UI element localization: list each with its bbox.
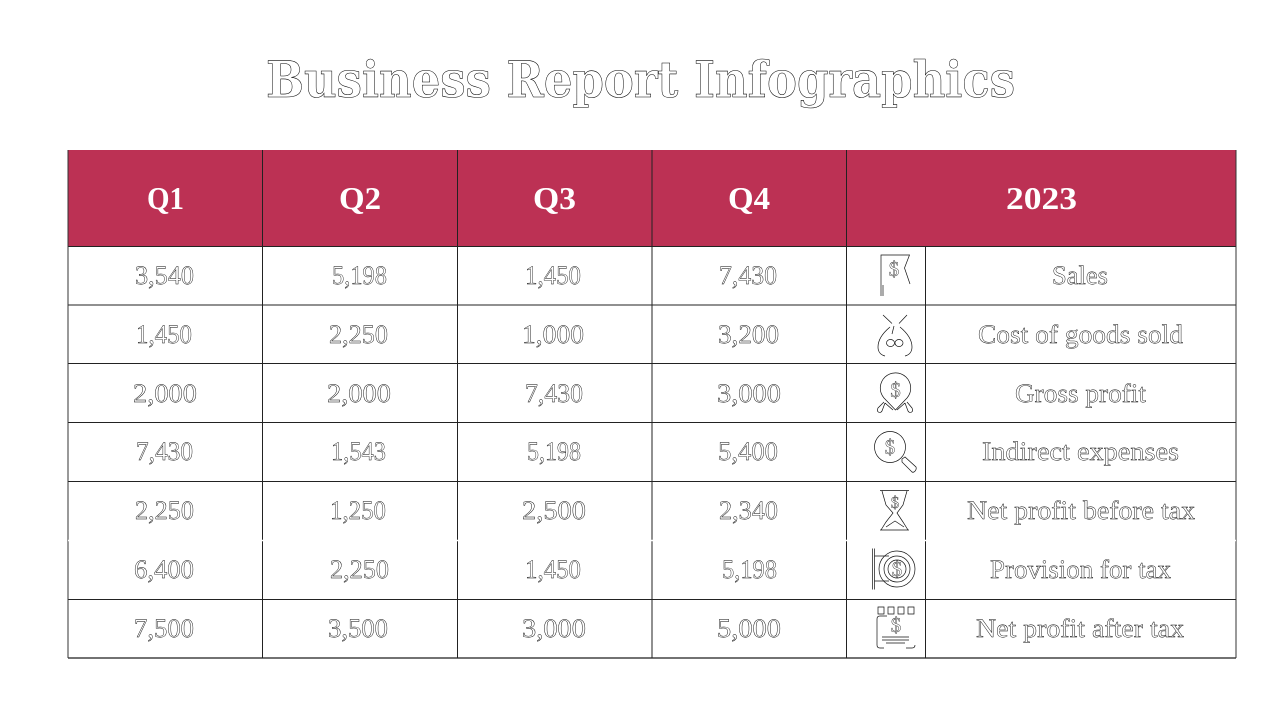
row: Net profit after tax: 3,000 — [522, 614, 586, 643]
icon: certificate with dollar: $ — [891, 613, 901, 637]
row: Provision for tax: 5,198 — [722, 555, 777, 584]
row: Sales: 1,450 — [525, 261, 581, 290]
icon: target sign with dollar: $ — [892, 557, 902, 581]
row: Net profit after tax: Net profit after tax — [976, 614, 1184, 643]
row: Provision for tax: 1,450 — [525, 555, 581, 584]
row: Net profit before tax: 2,250 — [135, 496, 194, 525]
row: Cost of goods sold: Cost of goods sold — [978, 320, 1183, 349]
row: Net profit before tax: 2,340 — [719, 496, 778, 525]
header: Q2: Q2 — [339, 180, 381, 216]
row: Gross profit: 3,000 — [717, 379, 781, 408]
row: Cost of goods sold: 1,000 — [522, 320, 584, 349]
row: Indirect expenses: 7,430 — [136, 437, 193, 466]
row: Cost of goods sold: 2,250 — [329, 320, 388, 349]
row: Sales: 5,198 — [332, 261, 387, 290]
header: 2023: 2023 — [1006, 180, 1077, 216]
row: Indirect expenses: 5,400 — [718, 437, 778, 466]
row: Provision for tax: Provision for tax — [990, 555, 1171, 584]
row: Indirect expenses: Indirect expenses — [982, 437, 1179, 466]
row: Sales: 3,540 — [135, 261, 194, 290]
row: Provision for tax — [134, 555, 1171, 584]
row: Sales: 7,430 — [719, 261, 777, 290]
row: Net profit after tax — [134, 614, 1184, 643]
icon: location pin with dollar: $ — [890, 378, 901, 402]
table — [68, 150, 1236, 658]
title: Business Report Infographics — [266, 50, 1015, 109]
row: Gross profit: 7,430 — [525, 379, 583, 408]
row: Net profit before tax — [135, 496, 1195, 525]
header: Q4: Q4 — [728, 180, 770, 216]
icon: flag with dollar: $ — [889, 257, 899, 281]
row: Sales — [135, 261, 1108, 290]
icon: flag with dollar — [881, 255, 910, 296]
row: Net profit before tax: Net profit before tax — [967, 496, 1195, 525]
row: Gross profit: Gross profit — [1015, 379, 1147, 408]
icon: certificate with dollar — [877, 607, 915, 648]
row: Net profit after tax: 5,000 — [717, 614, 781, 643]
icon: magnifier with dollar — [874, 432, 916, 472]
row: Gross profit: 2,000 — [327, 379, 391, 408]
header: Q1: Q1 — [147, 180, 184, 216]
row: Indirect expenses: 1,543 — [331, 437, 386, 466]
row: Net profit before tax: 1,250 — [330, 496, 386, 525]
icon: target sign with dollar — [872, 548, 915, 590]
icon: magnifier with dollar: $ — [885, 435, 895, 459]
row: Sales: Sales — [1052, 261, 1108, 290]
row: Cost of goods sold — [136, 320, 1183, 349]
icon: hourglass with dollar: $ — [891, 493, 899, 512]
row: Cost of goods sold: 3,200 — [718, 320, 779, 349]
row: Indirect expenses — [136, 437, 1179, 466]
row: Cost of goods sold: 1,450 — [136, 320, 192, 349]
icon: hourglass with dollar — [880, 490, 909, 530]
table header band — [68, 150, 1236, 246]
icon: location pin with dollar — [877, 373, 913, 412]
row: Gross profit: 2,000 — [133, 379, 197, 408]
row: Net profit after tax: 3,500 — [328, 614, 388, 643]
icon: money bag — [878, 315, 912, 356]
row: Net profit after tax: 7,500 — [134, 614, 194, 643]
row: Indirect expenses: 5,198 — [527, 437, 581, 466]
row: Provision for tax: 2,250 — [330, 555, 389, 584]
row: Provision for tax: 6,400 — [134, 555, 194, 584]
header: Q3: Q3 — [533, 180, 576, 216]
row: Net profit before tax: 2,500 — [522, 496, 586, 525]
row: Gross profit — [133, 379, 1147, 408]
